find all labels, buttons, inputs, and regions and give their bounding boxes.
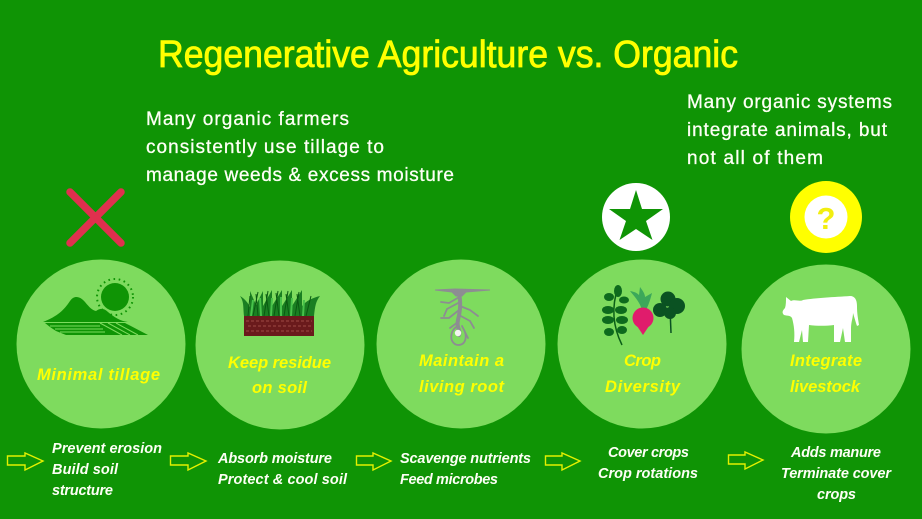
arrow 4 [546, 453, 580, 470]
text block: tillage note [146, 109, 454, 186]
text block: tillage note: manage weeds & excess moisture [146, 165, 454, 186]
text block: root benefits: Scavenge nutrients [400, 451, 531, 467]
icon: question badge: ? [817, 201, 835, 236]
panel: living root [376, 260, 546, 428]
label: keep residue: on soil [252, 379, 307, 397]
text block: animals note: not all of them [687, 148, 823, 169]
text block: animals note [687, 92, 892, 169]
text block: animals note: integrate animals, but [687, 120, 888, 141]
text block: diversity benefits: Crop rotations [598, 466, 698, 482]
panel: integrate livestock [742, 264, 910, 434]
text block: livestock benefits [781, 445, 892, 503]
label: crop diversity: Crop [624, 352, 661, 370]
title: Regenerative Agriculture vs. Organic [158, 34, 738, 76]
text block: livestock benefits: Adds manure [790, 445, 881, 461]
panel: crop diversity [558, 260, 726, 428]
label: integrate livestock [790, 352, 862, 396]
label: integrate livestock: livestock [790, 378, 861, 396]
icon: root [435, 289, 490, 345]
arrow 2 [170, 453, 206, 470]
label: keep residue: Keep residue [228, 354, 331, 372]
icon: question badge [790, 181, 862, 253]
text block: root benefits [400, 451, 531, 488]
text block: livestock benefits: Terminate cover [781, 466, 892, 482]
icon: cow [783, 296, 859, 342]
label: living root [419, 352, 506, 396]
text block: diversity benefits: Cover crops [608, 445, 689, 461]
label: living root: living root [419, 378, 506, 396]
icon: grass on soil [240, 290, 320, 336]
label: crop diversity [605, 352, 681, 396]
text block: root benefits: Feed microbes [400, 472, 498, 488]
text block: tillage benefits: Prevent erosion [52, 441, 162, 457]
text block: residue benefits: Absorb moisture [217, 451, 332, 467]
icon: vetch, radish and clover [602, 285, 685, 345]
text block: residue benefits [217, 451, 348, 488]
icon: red cross [70, 192, 121, 243]
panel: minimal tillage [16, 260, 186, 428]
text block: animals note: Many organic systems [687, 92, 892, 113]
label: minimal tillage: Minimal tillage [37, 366, 160, 384]
icon: star badge [602, 183, 670, 251]
text block: tillage benefits [52, 441, 162, 499]
label: keep residue [228, 354, 331, 397]
arrow 5 [728, 452, 763, 469]
text block: tillage note: Many organic farmers [146, 109, 349, 130]
text block: residue benefits: Protect & cool soil [218, 472, 348, 488]
text block: livestock benefits: crops [817, 487, 856, 503]
text block: tillage benefits: structure [52, 483, 113, 499]
text block: tillage note: consistently use tillage to [146, 137, 384, 158]
arrow 1 [8, 453, 43, 470]
label: integrate livestock: Integrate [790, 352, 862, 370]
text block: diversity benefits [598, 445, 698, 482]
text block: tillage benefits: Build soil [52, 462, 119, 478]
panel: keep residue [196, 260, 364, 430]
arrow 3 [356, 453, 391, 470]
label: crop diversity: Diversity [605, 378, 681, 396]
label: living root: Maintain a [419, 352, 504, 370]
icon: hills and sun [43, 279, 148, 335]
